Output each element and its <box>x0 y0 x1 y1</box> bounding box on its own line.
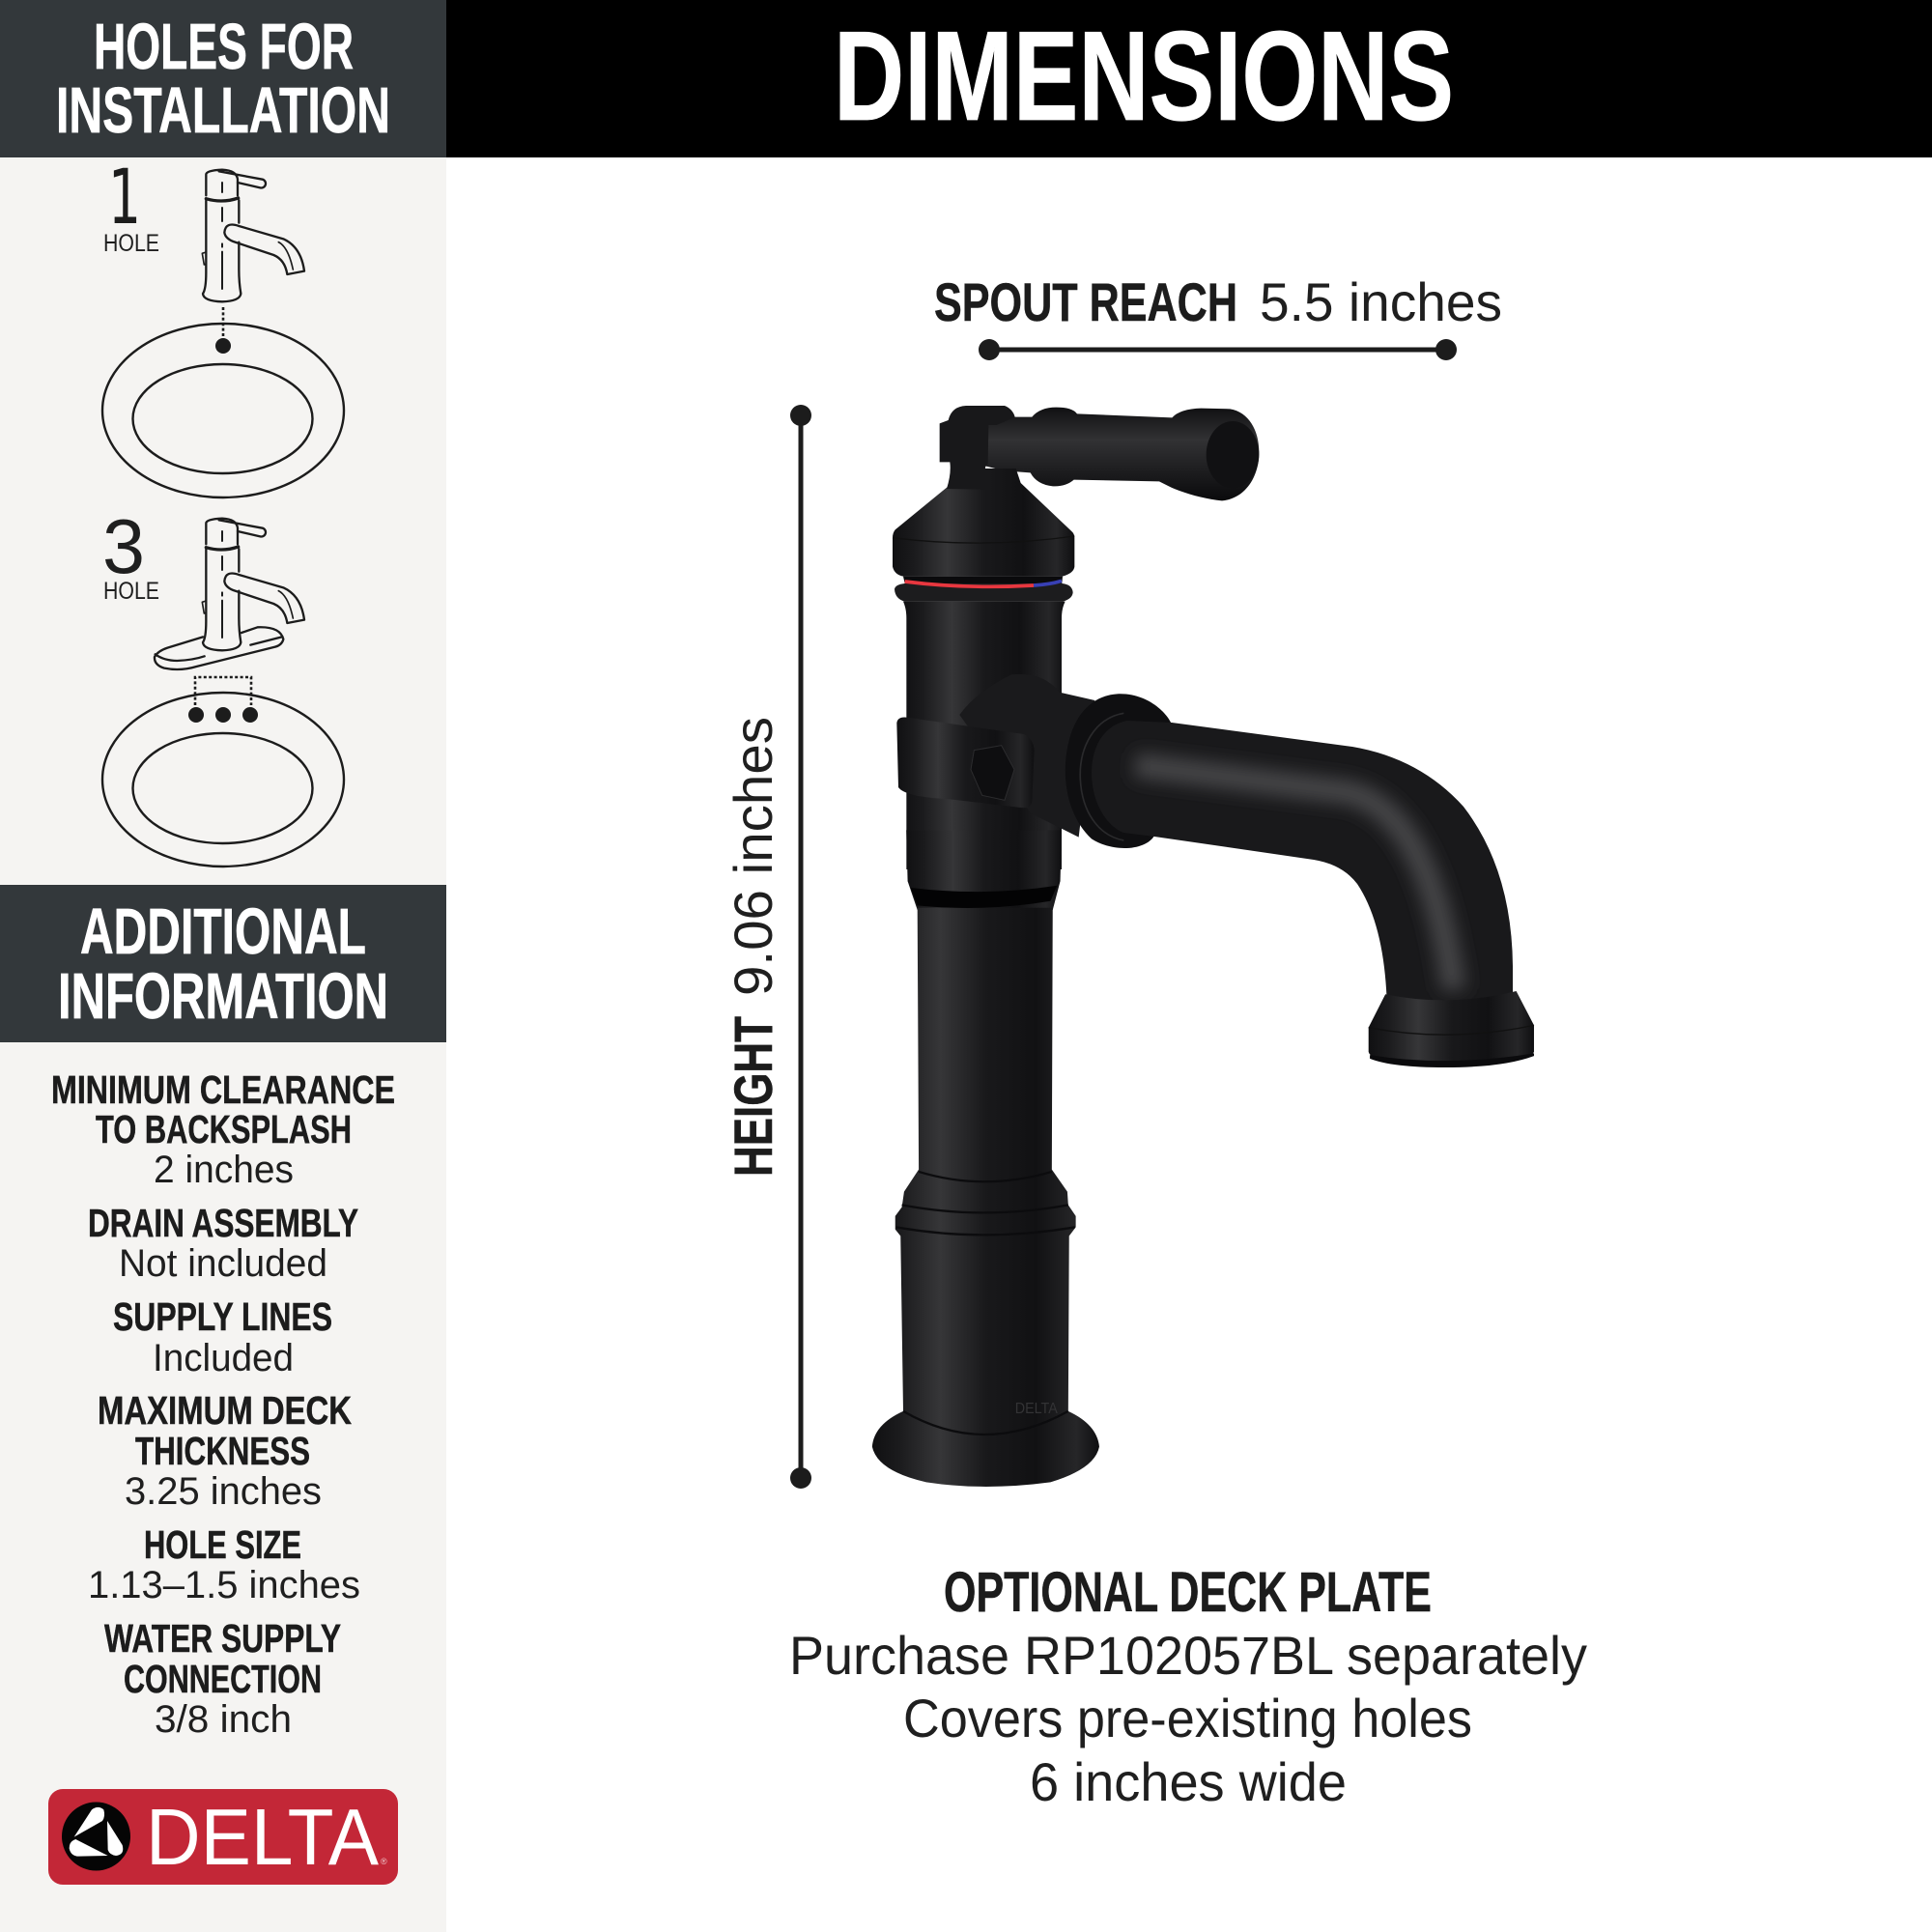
label: 3 hole: HOLE <box>103 578 159 605</box>
icon: single hole faucet line drawing <box>202 170 304 301</box>
label: 3 hole <box>102 503 159 605</box>
text block: supply lines <box>113 1294 332 1379</box>
text block: water supply connection: 3/8 inch <box>155 1698 292 1741</box>
faucet spout <box>1092 721 1513 1014</box>
text block: drain assembly: Not included <box>119 1242 327 1285</box>
label: 1 hole: HOLE <box>103 230 159 257</box>
text block: minimum clearance <box>51 1067 395 1191</box>
text block: drain assembly <box>88 1201 358 1285</box>
logo: delta: DELTA <box>146 1792 380 1882</box>
icon: three hole sink <box>102 677 344 867</box>
text block: minimum clearance: TO BACKSPLASH <box>96 1107 352 1151</box>
spout aerator <box>1369 991 1534 1067</box>
dimension label: height: 9.06 inches <box>723 717 783 996</box>
dimension label: spout reach: SPOUT REACH <box>934 271 1237 332</box>
text block: hole size <box>88 1522 360 1606</box>
panel: sidebar <box>0 0 446 1932</box>
faucet lower column and base <box>872 830 1099 1487</box>
dimension label: height: HEIGHT <box>723 1016 783 1177</box>
text block: supply lines: SUPPLY LINES <box>113 1294 332 1339</box>
label: 1 hole: 1 <box>108 155 141 242</box>
logo: delta: ® <box>381 1857 387 1866</box>
text block: hole size: HOLE SIZE <box>144 1522 301 1567</box>
arrow: height measure line <box>790 405 811 1489</box>
panel: additional information header: ADDITIONAL <box>80 895 366 968</box>
logo: delta <box>48 1789 398 1885</box>
text block: maximum deck thickness: THICKNESS <box>135 1429 310 1473</box>
dimension label: spout reach: 5.5 inches <box>1260 271 1502 332</box>
text block: supply lines: Included <box>153 1337 294 1379</box>
text block: water supply connection: CONNECTION <box>124 1657 322 1701</box>
text block: optional deck plate: OPTIONAL DECK PLATE <box>944 1561 1432 1624</box>
text block: minimum clearance: 2 inches <box>154 1149 294 1191</box>
text block: optional deck plate: 6 inches wide <box>1030 1751 1347 1812</box>
text block: optional deck plate: Covers pre-existing holes <box>903 1688 1472 1748</box>
dimension label: spout reach <box>934 271 1502 332</box>
panel: holes for installation header: INSTALLATION <box>56 74 390 147</box>
faucet product image <box>872 406 1534 1487</box>
text block: water supply connection <box>104 1616 341 1741</box>
text block: maximum deck thickness <box>98 1388 352 1513</box>
panel: holes for installation header: HOLES FOR <box>94 11 354 83</box>
faucet upper body and handle <box>893 406 1259 869</box>
text block: maximum deck thickness: MAXIMUM DECK <box>98 1388 352 1433</box>
text block: optional deck plate: Purchase RP102057BL separately <box>789 1625 1587 1686</box>
heading: dimensions: DIMENSIONS <box>834 5 1454 147</box>
label: 3 hole: 3 <box>102 503 145 589</box>
icon: three hole faucet with deck plate <box>155 519 304 669</box>
text block: hole size: 1.13–1.5 inches <box>88 1564 360 1606</box>
arrow: spout reach measure line <box>979 339 1457 360</box>
panel: additional information header: INFORMATION <box>58 960 388 1033</box>
faucet lower column and base: DELTA <box>1015 1401 1058 1417</box>
text block: drain assembly: DRAIN ASSEMBLY <box>88 1201 358 1245</box>
dimension label: height <box>723 717 783 1177</box>
text block: minimum clearance: MINIMUM CLEARANCE <box>51 1067 395 1112</box>
panel: additional information header <box>0 885 446 1042</box>
text block: water supply connection: WATER SUPPLY <box>104 1616 341 1661</box>
text block: optional deck plate <box>789 1561 1587 1812</box>
text block: maximum deck thickness: 3.25 inches <box>125 1470 322 1513</box>
panel: holes for installation header <box>0 0 446 157</box>
icon: single hole sink <box>102 307 344 497</box>
panel: dimensions header bar <box>446 0 1932 157</box>
